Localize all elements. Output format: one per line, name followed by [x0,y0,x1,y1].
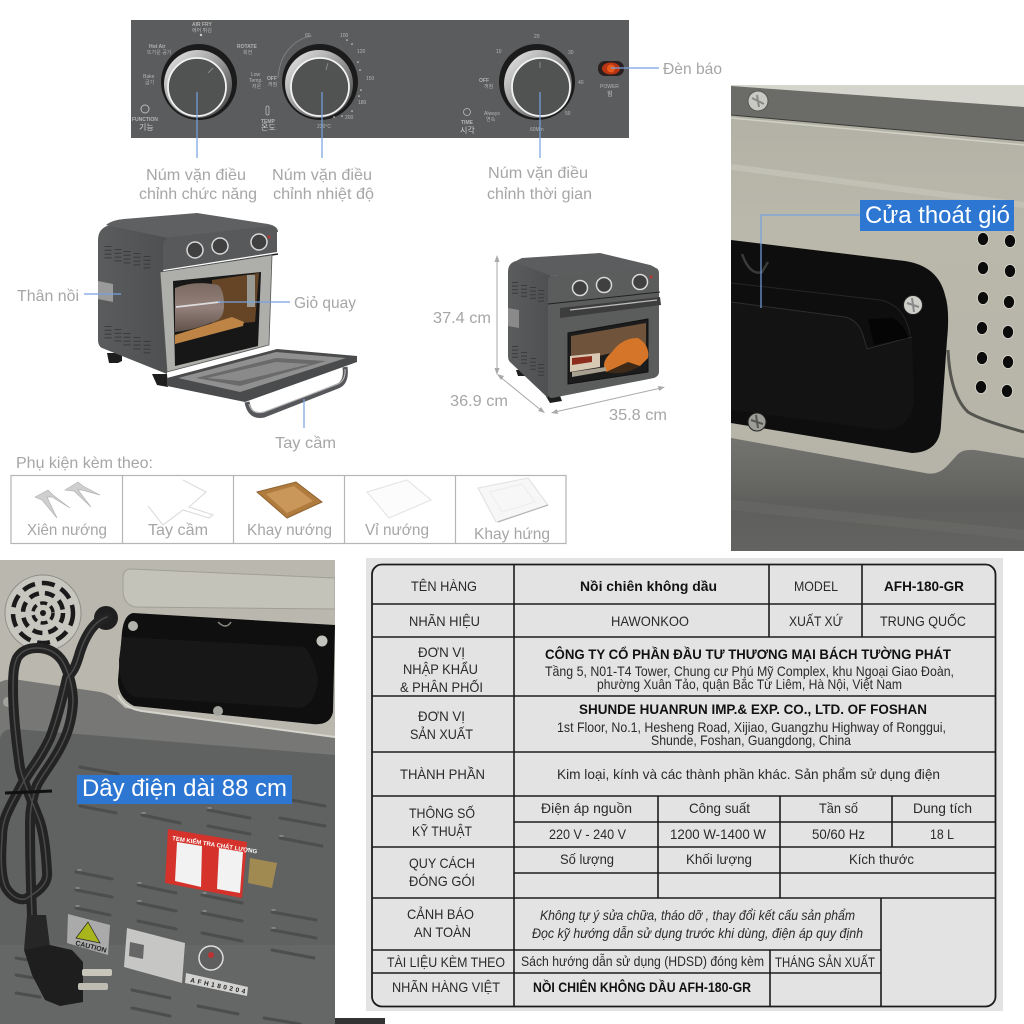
oven knobs [187,234,267,258]
illustration: open oven [98,213,357,415]
function dial labels: ROTATE [237,44,257,50]
row: brand: HAWONKOO [611,613,689,629]
leader line [761,215,860,308]
icon: drip tray [478,478,548,522]
icon: baking tray [257,482,322,518]
control labels: Đèn báo [663,61,722,78]
row: importer: ĐƠN VỊ [418,644,465,660]
oven body side [98,225,170,374]
row: specifications: 1200 W-1400 W [670,826,767,842]
power cord [1,617,107,915]
row: specifications: 18 L [930,826,954,842]
quality sticker [165,829,258,898]
control labels: Núm vặn điều [488,165,588,182]
row: composition [400,766,940,782]
caution sticker [67,914,110,955]
dimension arrows [494,255,665,414]
function dial labels: Hot Air [149,44,166,50]
oven interior [173,272,261,366]
oven window [568,319,648,384]
table grid [372,564,995,1006]
callout: air vent: Cửa thoát gió [865,202,1010,229]
plug [24,915,112,1006]
function dial labels: Temp. [249,78,263,84]
baking tray [175,317,244,344]
row: specifications: Điện áp nguồn [541,800,632,816]
control labels: Núm vặn điều [146,167,246,184]
row: documents: Sách hướng dẫn sử dụng (HDSD) đóng kèm [521,953,764,969]
top light band [731,85,1024,108]
beige housing [731,116,1024,474]
dimension labels [433,310,667,424]
beige housing [0,560,335,736]
leader lines for control panel [197,68,659,158]
function dial labels [132,22,263,132]
row: manufacturer: Shunde, Foshan, Guangdong, China [651,732,851,748]
oven feet [107,353,168,387]
icon: skewers [35,482,100,518]
chicken picture [604,338,648,373]
function dial labels: 뜨거운 공기 [147,49,171,56]
row: brand: NHÃN HIỆU [409,613,480,629]
time dial labels: 10 [496,49,502,55]
control labels: Núm vặn điều [272,167,372,184]
door handle [560,297,661,318]
time dial labels: OFF [479,78,489,84]
panel: power cord photo [0,560,335,1024]
temperature dial labels: OFF [267,76,277,82]
row: documents: TÀI LIỆU KÈM THEO [387,954,505,970]
row: safety warning: AN TOÀN [414,924,471,940]
oven side [508,261,552,398]
icon: screw right [904,296,922,314]
row: specifications: 220 V - 240 V [549,826,627,842]
row: product name: Nồi chiên không dầu [580,578,717,594]
row: specifications: Dung tích [913,800,972,816]
notch [742,254,768,273]
temperature dial labels: 200 [345,115,354,121]
strain relief [24,915,50,950]
function dial labels: 회전 [243,49,253,56]
row: safety warning: CẢNH BÁO [407,906,474,922]
row: manufacturer: SHUNDE HUANRUN IMP.& EXP. CO., LTD. OF FOSHAN [579,701,927,717]
oven feet [516,370,562,403]
time dial labels: 시각 [460,125,475,135]
door handle [247,367,345,415]
time dial labels: 50 [565,111,571,117]
plug body [24,945,83,1006]
row: safety warning: Không tự ý sửa chữa, tháo dỡ , thay đổi kết cấu sản phẩm [540,907,855,923]
accessory labels: Xiên nướng [27,522,107,539]
dimension labels: 35.8 cm [609,407,667,424]
quality sticker: TEM KIỂM TRA CHẤT LƯỢNG [172,835,258,855]
inner gray panel [0,729,335,1024]
accessory labels: Khay nướng [247,522,332,539]
time dial labels: 30 [568,50,574,56]
row: product name: MODEL [794,578,838,594]
temperature dial labels: 꺼짐 [268,81,277,88]
dimension labels: 36.9 cm [450,393,508,410]
icon: fan grille [5,575,81,651]
oven top [106,213,278,238]
temperature dial labels: TEMP [261,119,276,125]
side label [98,281,113,302]
dimension labels: 37.4 cm [433,310,491,327]
black vent surround [118,613,335,724]
control labels: chỉnh chức năng [139,186,257,203]
icon: power light: POWER [600,84,619,90]
oven front [548,268,659,398]
control labels [139,61,722,203]
icon: screw top [748,91,768,111]
vent slats [16,767,325,1024]
function dial labels: 에어 튀김 [192,27,212,34]
rotating basket [175,283,224,332]
panel: air vent photo [731,85,1024,551]
vent holes [976,232,1016,398]
oven door frame [160,255,272,372]
side vents [515,282,541,376]
panel: control panel [131,20,629,138]
open door [167,349,357,402]
row: composition: Kim loại, kính và các thành phần khác. Sản phẩm sử dụng điện [557,766,940,782]
dark top rail [731,86,1024,141]
row: manufacturer: 1st Floor, No.1, Hesheng Road, Xijiao, Guangzhu Highway of Ronggui, [557,719,946,735]
icon: power light [598,61,624,98]
temperature dial labels: 150 [366,76,375,82]
row: vietnamese label: NỒI CHIÊN KHÔNG DẦU AFH-180-GR [533,978,751,995]
icon: screw bottom [748,413,766,431]
function dial labels: AIR FRY [192,22,212,28]
row: packaging: Khối lượng [686,851,752,867]
accessories heading: Phụ kiện kèm theo: [16,455,153,472]
function dial labels: FUNCTION [132,117,158,123]
raised edge outline [948,350,1024,432]
control labels: chỉnh thời gian [487,186,592,203]
row: specifications: KỸ THUẬT [412,823,472,839]
time dial labels: 20 [534,34,540,40]
oven part labels: Tay cầm [275,435,336,452]
time dial labels: TIME [461,120,474,126]
oven top [514,253,658,276]
bottom corner strip [335,1018,385,1024]
accessory labels: Vỉ nướng [365,522,429,539]
temperature dial labels: 120 [357,49,366,55]
accessory labels: Tay cầm [148,522,208,539]
cord grommet [94,606,118,630]
knobs [572,274,648,296]
panel: accessories [11,476,566,544]
oven part labels [17,288,356,452]
plug pins [82,969,112,976]
row: importer: & PHÂN PHỐI [400,678,483,695]
vent lid [731,302,914,430]
row: manufacturer: SẢN XUẤT [410,726,473,742]
black vent surround [731,240,948,453]
row: safety warning [407,906,863,941]
function dial labels: Low [251,72,261,78]
row: brand: TRUNG QUỐC [880,612,966,629]
temperature dial labels: 100 [340,33,349,39]
row: product name: TÊN HÀNG [411,578,477,594]
vent lid [119,641,122,667]
red text band [570,353,606,377]
table background [366,558,1003,1011]
row: manufacturer [410,701,946,748]
energy label [124,928,185,983]
row: importer: Tầng 5, N01-T4 Tower, Chung cư Phú Mỹ Complex, khu Ngoại Giao Đoàn, [545,663,954,679]
accessory labels: Khay hứng [474,526,550,543]
temperature dial labels: 온도 [261,123,276,132]
time dial labels: 연속 [486,116,496,123]
icon: power light: 힘 [607,90,613,98]
control labels: chỉnh nhiệt độ [273,186,374,203]
temperature dial labels: 180 [358,100,367,106]
row: packaging: QUY CÁCH [409,855,475,871]
time dial labels: 40 [578,80,584,86]
side vents [108,246,147,355]
row: brand: XUẤT XỨ [789,613,843,629]
row: importer: NHẬP KHẨU [403,660,478,677]
row: specifications [409,800,972,842]
icon: time knob [499,44,575,120]
lower gray shell [731,438,1024,551]
row: importer: phường Xuân Tảo, quận Bắc Từ Liêm, Hà Nội, Việt Nam [597,676,902,692]
icon: handle [148,480,213,525]
oven part labels: Thân nồi [17,288,79,305]
temperature dial labels: 60 [305,33,311,39]
row: product name [411,578,964,594]
row: brand [409,612,966,629]
caution sticker: CAUTION [75,940,107,955]
row: specifications: THÔNG SỐ [409,804,475,821]
function dial labels: Bake [143,74,155,80]
temperature dial labels [261,33,375,132]
time dial labels: 60Min [530,127,544,133]
row: documents [387,953,875,970]
icon: temperature knob [278,36,358,120]
icon: function knob [161,44,237,120]
time dial labels [460,34,584,135]
function dial labels: 저온 [252,83,262,90]
row: specifications: 50/60 Hz [812,826,865,842]
row: importer: CÔNG TY CỔ PHẦN ĐẦU TƯ THƯƠNG MẠI BÁCH TƯỜNG PHÁT [545,645,951,662]
temperature dial labels: 230°C [317,124,331,130]
oven front panel [163,226,277,270]
row: packaging [409,851,914,889]
time dial labels: 꺼짐 [484,83,493,90]
time dial labels: Always [484,111,500,117]
row: vietnamese label: NHÃN HÀNG VIỆT [392,979,500,995]
row: manufacturer: ĐƠN VỊ [418,708,465,724]
raised beige panel [123,569,335,609]
row: documents: THÁNG SẢN XUẤT [775,954,875,970]
gold sticker [248,858,277,888]
row: packaging: ĐÓNG GÓI [409,873,475,889]
row: specifications: Tần số [819,800,858,816]
icon: wire rack [367,480,431,518]
lower gray shell [0,680,335,755]
row: packaging: Kích thước [849,851,914,867]
control panel plate [131,20,629,138]
screws [128,621,138,631]
row: composition: THÀNH PHẦN [400,766,485,782]
row: vietnamese label [392,978,751,995]
row: safety warning: Đọc kỹ hướng dẫn sử dụng trước khi dùng, điện áp quy định [532,925,863,941]
function dial labels: 기능 [139,123,154,132]
callout: cord length: Dây điện dài 88 cm [82,775,287,802]
function dial labels: 굽기 [145,79,154,86]
table frame [372,564,996,1006]
cable tie [5,791,52,793]
round seal [199,946,223,970]
row: specifications: Công suất [689,800,750,816]
row: product name: AFH-180-GR [884,578,964,594]
oven part labels: Giỏ quay [294,295,356,312]
serial label: AFH180204 [190,977,246,996]
accessories grid [11,476,566,544]
row: importer [400,644,954,695]
panel: product label table [366,558,1003,1011]
row: packaging: Số lượng [560,851,614,867]
illustration: closed oven with dimensions [508,253,661,403]
accessory labels [27,522,550,543]
